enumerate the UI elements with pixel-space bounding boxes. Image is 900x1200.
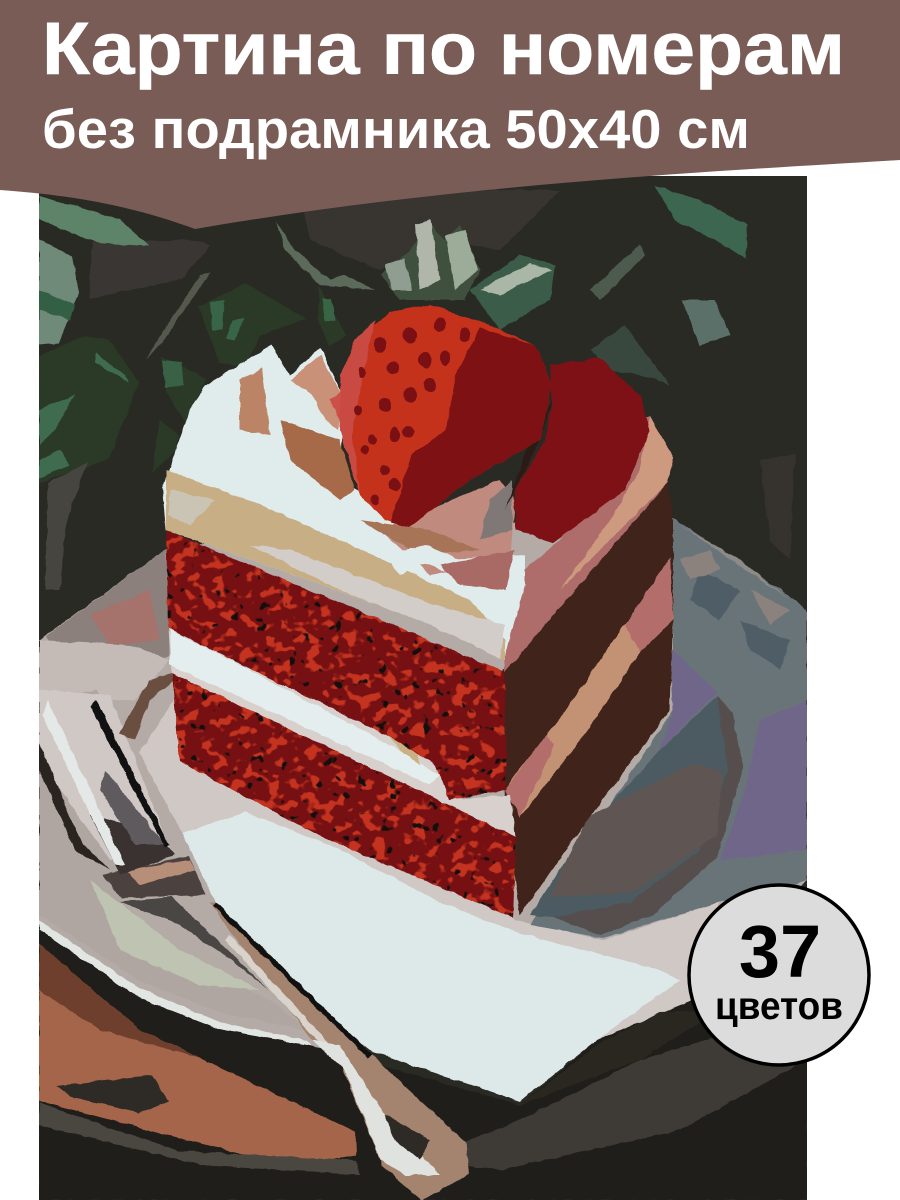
fork [39,700,469,1200]
top banner [0,0,900,229]
napkin [182,812,680,1101]
title: Картина по номерам [42,7,845,90]
chocolate side [500,480,673,915]
subtitle: без подрамника 50х40 см [42,98,750,160]
front strawberry [340,305,552,528]
colour count badge [689,885,869,1065]
painting [39,176,807,1200]
colour count badge: 37 [739,910,821,993]
pink filling stripe [505,558,673,817]
plate [39,518,807,1048]
cake [160,305,673,920]
sponge stripe [168,628,516,837]
background foliage [39,185,795,590]
rear strawberry [515,358,650,543]
cream top [162,345,525,655]
table and wood [39,930,807,1200]
strawberry seeds [354,318,470,505]
sponge texture [160,520,520,920]
red sponge layers [166,530,516,918]
colour count badge: цветов [715,985,843,1028]
pink top slab [500,416,673,672]
